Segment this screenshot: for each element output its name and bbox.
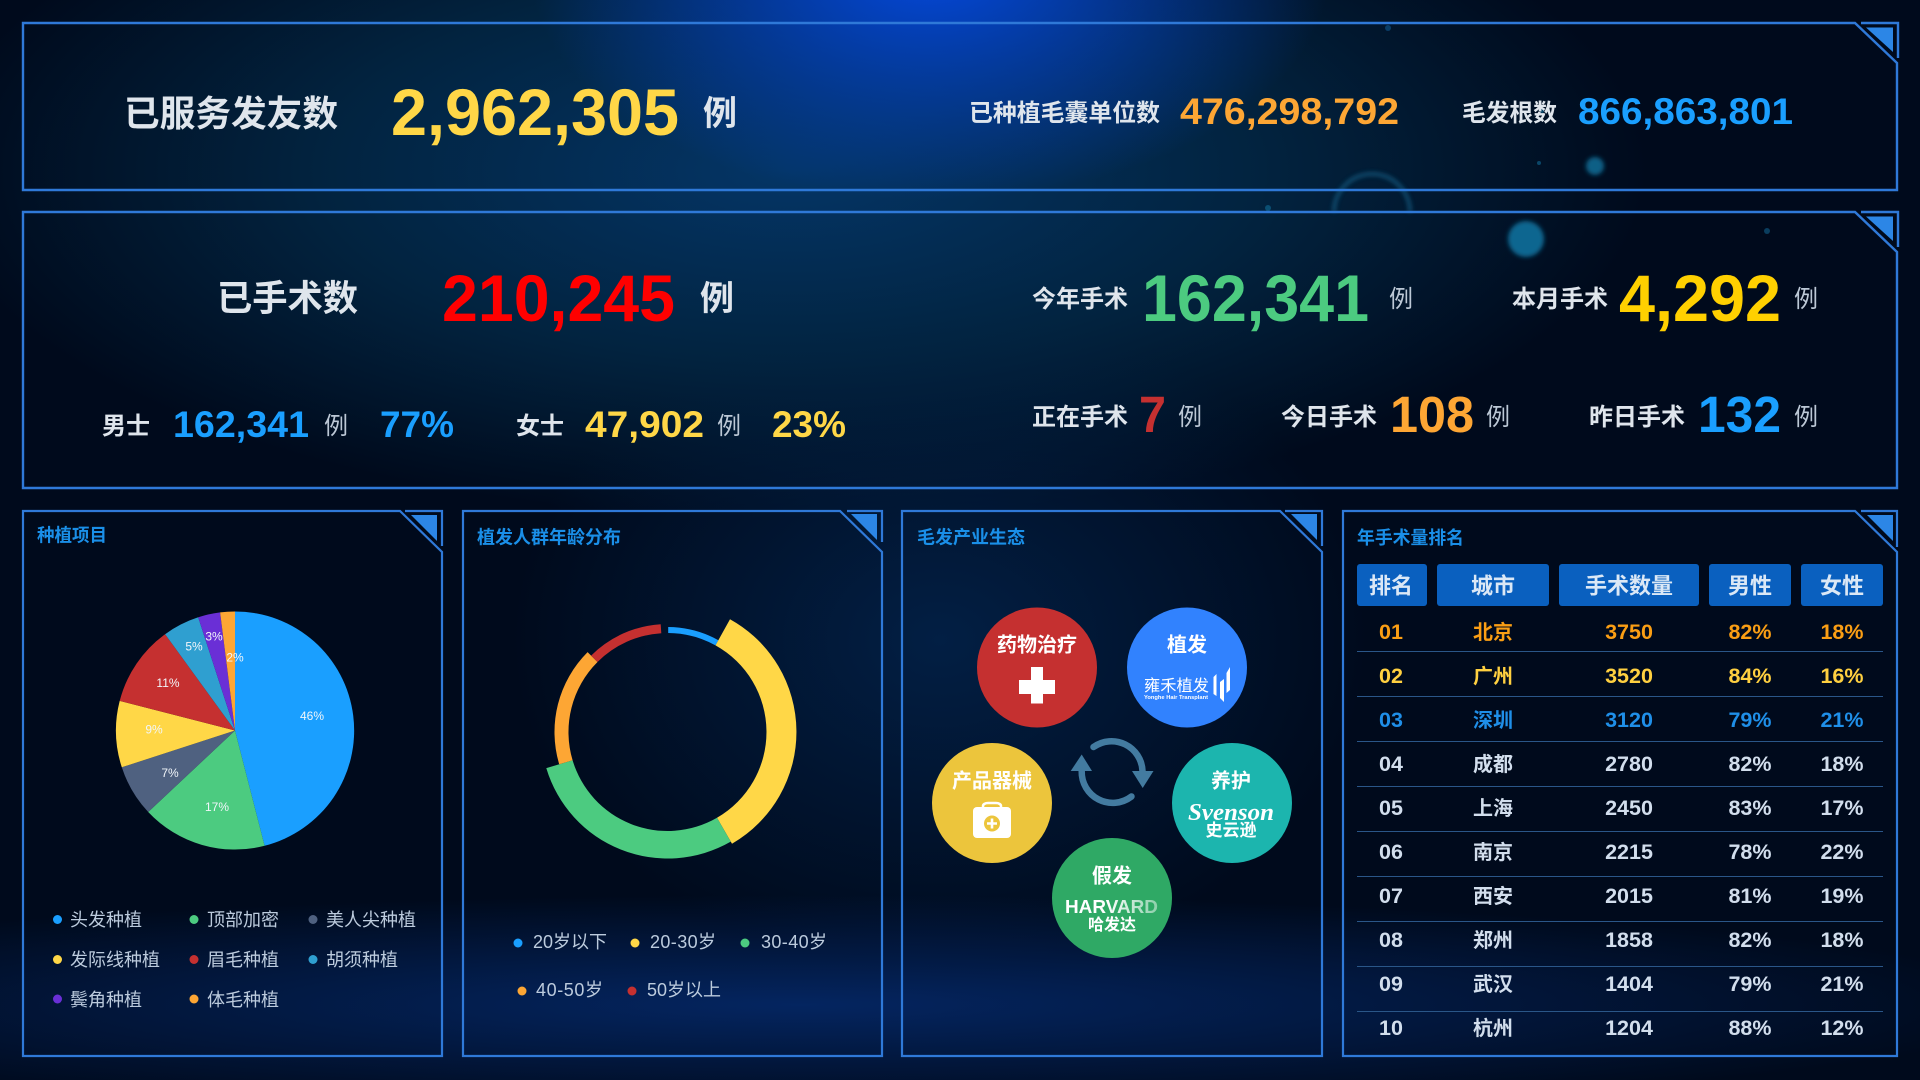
rose donut chart [546, 619, 796, 859]
row 03: 03 [1379, 708, 1403, 732]
number: surgeries: 210,245 [442, 261, 675, 335]
row 03: 79% [1728, 708, 1772, 732]
row 04: 82% [1728, 752, 1772, 776]
row 08: 18% [1820, 928, 1864, 952]
female stats [516, 404, 846, 445]
heading: surgeries: 已手术数 [217, 278, 358, 318]
bubble: hair care: Svenson [1188, 800, 1274, 826]
donut legend: 50岁以上 [647, 980, 721, 1000]
row 07: 81% [1728, 884, 1772, 908]
donut legend: 40-50岁 [536, 980, 603, 1000]
row 05: 05 [1379, 796, 1403, 820]
row 08: 1858 [1605, 928, 1653, 952]
row 04: 成都 [1473, 752, 1513, 776]
female stats: 女士 [516, 413, 564, 440]
bubble: hair care [1172, 743, 1292, 863]
panel: hair industry ecosystem [902, 511, 1322, 1056]
bubble: hair pieces: HARVARD [1065, 897, 1158, 917]
unit: 例 [700, 280, 734, 318]
pie chart: 17% [205, 800, 229, 814]
row 05 [1379, 796, 1864, 820]
row 01: 82% [1728, 620, 1772, 644]
row 04: 18% [1820, 752, 1864, 776]
stat: today: 例 [1486, 404, 1510, 431]
pie legend: 眉毛种植 [207, 950, 279, 970]
row 09: 09 [1379, 972, 1403, 996]
number: hair count: 866,863,801 [1578, 91, 1793, 132]
stat: in progress: 正在手术 [1032, 404, 1128, 431]
row 03: 3120 [1605, 708, 1653, 732]
heading: 种植项目 [37, 524, 107, 546]
row 07: 2015 [1605, 884, 1653, 908]
stat: today: 今日手术 [1281, 403, 1377, 431]
female stats: 23% [772, 404, 846, 445]
bubble: drug therapy: 药物治疗 [997, 634, 1077, 656]
pie legend: 顶部加密 [207, 910, 279, 930]
stat: this month: 例 [1794, 286, 1818, 313]
bubble: hair transplant: 雍禾植发 [1144, 677, 1209, 695]
pie chart: 11% [156, 676, 180, 690]
bubble: hair pieces: 哈发达 [1088, 915, 1136, 934]
stat: in progress: 例 [1178, 404, 1202, 431]
table header: 男性 [1728, 574, 1772, 598]
row 09: 1404 [1605, 972, 1653, 996]
row 09 [1379, 972, 1864, 996]
stat: this month: 4,292 [1619, 261, 1781, 335]
cycle arrows [1071, 741, 1154, 803]
row 02 [1379, 664, 1864, 688]
row 01 [1379, 620, 1864, 644]
donut legend: 20-30岁 [650, 932, 716, 952]
male stats [102, 404, 454, 445]
female stats: 例 [717, 413, 741, 440]
number: follicle units: 476,298,792 [1180, 91, 1399, 132]
pie chart: 3% [205, 630, 223, 644]
stat: today [1281, 386, 1510, 443]
pie legend: 美人尖种植 [326, 910, 416, 930]
row 02: 84% [1728, 664, 1772, 688]
pie chart: 9% [145, 722, 163, 736]
stat: yesterday: 昨日手术 [1589, 404, 1685, 431]
bubble: hair care: 史云逊 [1206, 821, 1256, 840]
stat: in progress [1032, 386, 1202, 443]
row 05: 上海 [1473, 797, 1513, 820]
heading: 植发人群年龄分布 [477, 526, 621, 548]
pie chart: 5% [185, 640, 203, 654]
row 07 [1379, 884, 1864, 908]
pie legend [53, 910, 416, 1010]
row 08: 郑州 [1473, 929, 1513, 952]
table header [1357, 564, 1883, 606]
panel corner ornament [1285, 511, 1322, 546]
row 08 [1379, 928, 1864, 952]
row 05: 17% [1820, 796, 1864, 820]
stat: this year: 例 [1389, 286, 1413, 313]
panel corner ornament [405, 511, 442, 546]
panel: planting projects [23, 511, 442, 1056]
bubble: hair care: 养护 [1211, 768, 1251, 792]
row 07: 07 [1379, 884, 1403, 908]
row 10: 88% [1728, 1016, 1772, 1040]
table header: 女性 [1820, 574, 1864, 598]
label: hair count: 毛发根数 [1462, 100, 1557, 127]
row 06: 22% [1820, 840, 1864, 864]
pie chart: 2% [226, 650, 244, 664]
stat: yesterday: 132 [1698, 386, 1781, 443]
row 08: 08 [1379, 928, 1403, 952]
bubble: hair transplant [1127, 608, 1247, 728]
panel: served clients summary [23, 23, 1898, 190]
row 10: 1204 [1605, 1016, 1653, 1040]
unit: 例 [703, 95, 737, 133]
row 06: 南京 [1473, 840, 1513, 864]
heading: 毛发产业生态 [917, 526, 1025, 548]
panel corner ornament [1861, 23, 1898, 58]
stat: this year [1032, 261, 1413, 335]
bubble: products and devices [932, 743, 1052, 863]
row 10: 10 [1379, 1016, 1403, 1040]
row 02: 广州 [1473, 665, 1513, 688]
bubble: hair pieces [1052, 838, 1172, 958]
pie chart: 46% [300, 709, 324, 723]
panel: annual surgery ranking [1343, 511, 1897, 1056]
row 04 [1379, 752, 1864, 776]
bubble: products and devices: 产品器械 [952, 770, 1032, 792]
row 06: 2215 [1605, 840, 1653, 864]
bubble: hair transplant: Yonghe Hair Transplant [1144, 695, 1208, 701]
female stats: 47,902 [585, 404, 704, 445]
bubble: drug therapy [977, 608, 1097, 728]
pie legend: 发际线种植 [70, 950, 160, 970]
row 10: 12% [1820, 1016, 1864, 1040]
panel corner ornament [1861, 511, 1897, 547]
heading: 年手术量排名 [1357, 527, 1464, 548]
row 10 [1379, 1016, 1864, 1040]
donut legend [514, 932, 827, 1000]
row 02: 16% [1820, 664, 1864, 688]
row 01: 3750 [1605, 620, 1653, 644]
row 01: 北京 [1473, 620, 1513, 644]
stat: in progress: 7 [1139, 386, 1166, 443]
stat: this month [1512, 261, 1818, 335]
stat: this month: 本月手术 [1512, 286, 1608, 313]
stat: yesterday [1589, 386, 1818, 443]
row 09: 21% [1820, 972, 1864, 996]
panel: age distribution [463, 511, 882, 1056]
row 10: 杭州 [1473, 1016, 1513, 1040]
row 03: 21% [1820, 708, 1864, 732]
pie legend: 头发种植 [70, 910, 142, 930]
stat: today: 108 [1390, 386, 1474, 443]
row 03 [1379, 708, 1864, 732]
table header: 城市 [1471, 574, 1515, 598]
row 02: 02 [1379, 664, 1403, 688]
row 06 [1379, 840, 1864, 864]
pie legend: 鬓角种植 [70, 989, 142, 1010]
row 08: 82% [1728, 928, 1772, 952]
row 04: 04 [1379, 752, 1403, 776]
number: served clients: 2,962,305 [391, 75, 679, 149]
row 02: 3520 [1605, 664, 1653, 688]
row 05: 2450 [1605, 796, 1653, 820]
table row dividers [1357, 652, 1883, 1012]
pie legend: 胡须种植 [326, 950, 398, 970]
heading: served clients: 已服务发友数 [124, 93, 338, 134]
donut legend: 20岁以下 [533, 932, 607, 952]
row 06: 06 [1379, 840, 1403, 864]
male stats: 77% [380, 404, 454, 445]
bubble: hair transplant: 植发 [1167, 632, 1207, 656]
panel corner ornament [1861, 212, 1898, 247]
male stats: 162,341 [173, 404, 309, 445]
male stats: 例 [324, 413, 348, 440]
pie chart [116, 611, 354, 850]
row 01: 01 [1379, 620, 1403, 644]
stat: this year: 162,341 [1142, 261, 1369, 335]
table header: 排名 [1369, 574, 1413, 598]
bubble: hair pieces: 假发 [1092, 864, 1132, 888]
donut legend: 30-40岁 [761, 932, 827, 952]
stat: yesterday: 例 [1794, 404, 1818, 431]
pie chart: 7% [161, 766, 179, 780]
panel: surgery counts [23, 212, 1898, 488]
pie legend: 体毛种植 [207, 990, 279, 1010]
row 09: 79% [1728, 972, 1772, 996]
table header: 手术数量 [1585, 574, 1673, 598]
male stats: 男士 [102, 413, 150, 440]
row 06: 78% [1728, 840, 1772, 864]
label: follicle units: 已种植毛囊单位数 [969, 99, 1160, 127]
row 01: 18% [1820, 620, 1864, 644]
row 05: 83% [1728, 796, 1772, 820]
stat: this year: 今年手术 [1032, 285, 1128, 313]
row 09: 武汉 [1473, 973, 1513, 996]
row 04: 2780 [1605, 752, 1653, 776]
row 03: 深圳 [1473, 709, 1513, 732]
row 07: 19% [1820, 884, 1864, 908]
panel corner ornament [847, 511, 882, 542]
row 07: 西安 [1473, 885, 1513, 908]
